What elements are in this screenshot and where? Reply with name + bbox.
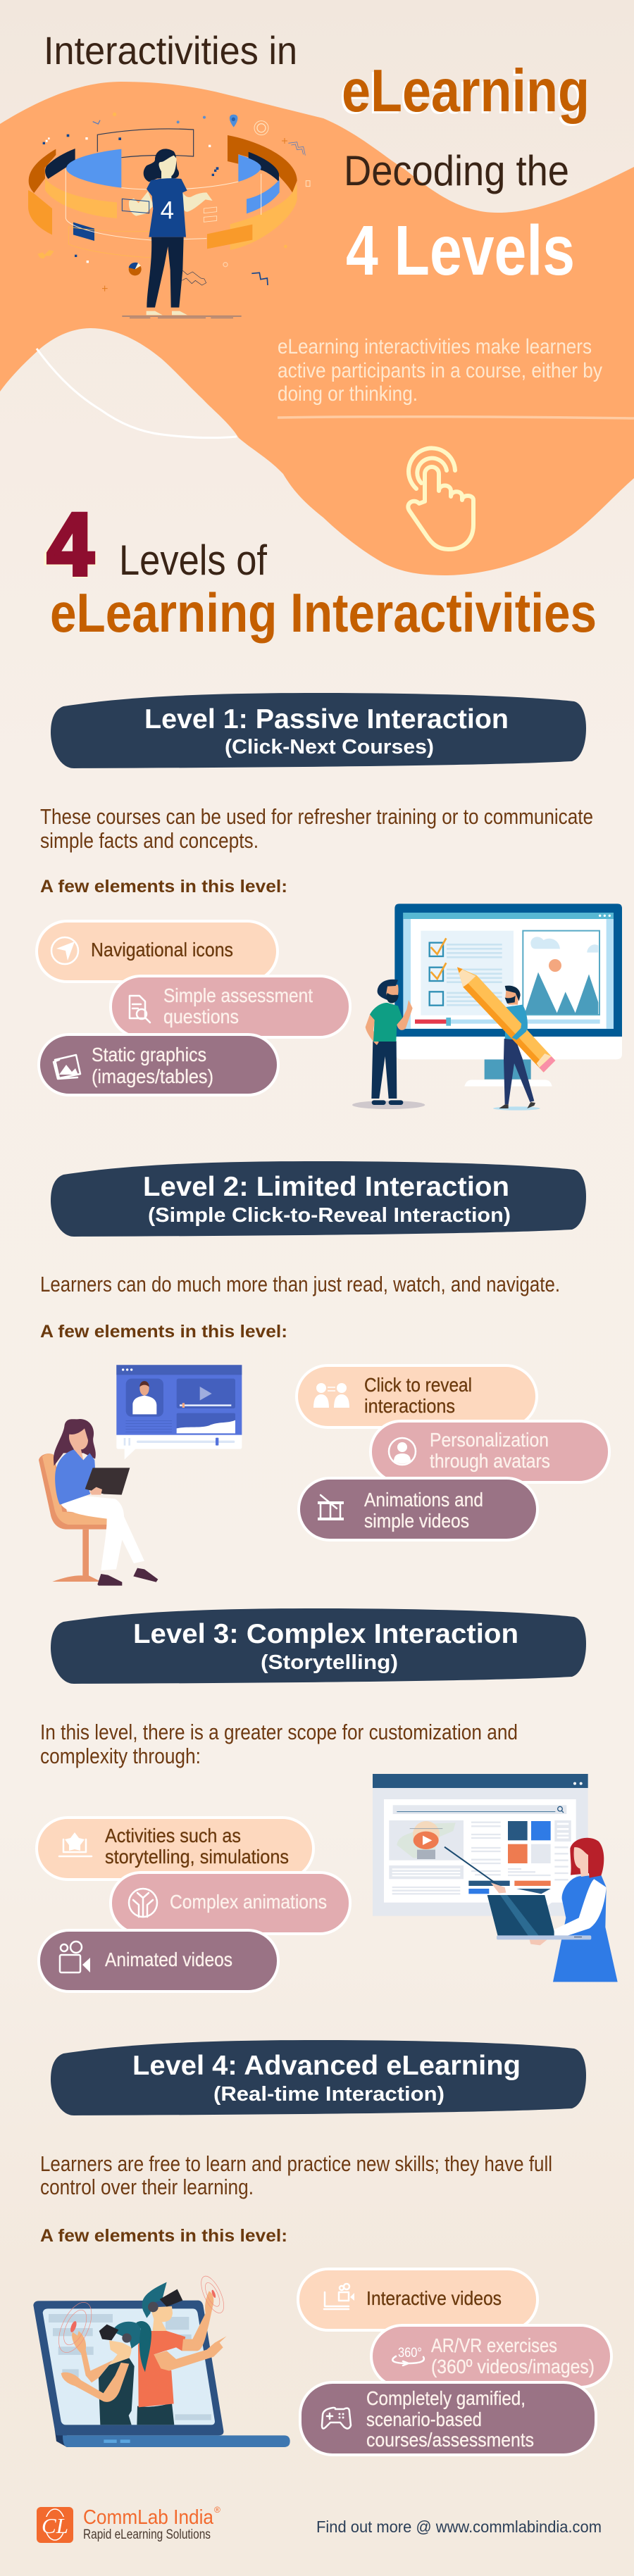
illustration: VR users emerging from laptop: [33, 2273, 290, 2447]
orange hero blob: [0, 82, 634, 575]
level 3 description: complexity through:: [40, 1744, 201, 1768]
level 1 subheading: A few elements in this level:: [40, 877, 287, 896]
pill: static graphics: (images/tables): [92, 1065, 213, 1087]
panel: level 3: [37, 1608, 618, 1992]
level 4 subheading: A few elements in this level:: [40, 2226, 287, 2246]
level 3 description: [40, 1720, 518, 1768]
title: Decoding the: Decoding the: [344, 147, 569, 194]
heading: 4 Levels of: 4: [44, 497, 95, 595]
level 2 banner: [51, 1161, 586, 1237]
pill: click to reveal: Click to reveal: [364, 1374, 472, 1396]
footer link: Find out more @ www.commlabindia.com: [316, 2518, 602, 2536]
level 4 description: control over their learning.: [40, 2175, 254, 2199]
pill: AR/VR exercises: [371, 2325, 611, 2387]
footer logo: Rapid eLearning Solutions: [83, 2527, 211, 2542]
illustration: presenter and browser window: [373, 1774, 618, 1982]
title: Interactivities in: Interactivities in: [44, 28, 297, 73]
pill: personalization: through avatars: [430, 1450, 550, 1472]
pill: gamified courses: Completely gamified,: [366, 2387, 526, 2409]
footer logo: ®: [214, 2505, 220, 2515]
pill: AR/VR exercises: AR/VR exercises: [431, 2334, 557, 2356]
icon: pointing hand: [408, 448, 473, 549]
panel: level 1: [37, 693, 622, 1111]
pill: navigational icons: Navigational icons: [91, 939, 233, 961]
pill: animated videos: [39, 1930, 278, 1992]
panel: level 2: [39, 1161, 609, 1586]
footer logo: [37, 2505, 220, 2543]
pill: gamified courses: courses/assessments: [366, 2429, 534, 2451]
pill: static graphics: [39, 1034, 278, 1095]
level 2 banner: Level 2: Limited Interaction: [143, 1172, 509, 1202]
footer logo: CommLab India: [83, 2506, 214, 2529]
title: eLearning: eLearning: [340, 60, 588, 127]
title: 4 Levels: 4 Levels: [346, 211, 575, 290]
decorative white curve: [37, 349, 237, 438]
level 3 banner: (Storytelling): [261, 1651, 398, 1674]
level 1 description: simple facts and concepts.: [40, 828, 259, 853]
level 2 banner: (Simple Click-to-Reveal Interaction): [148, 1204, 511, 1227]
illustration: woman with interactive rings: [28, 113, 310, 318]
level 1 banner: [51, 693, 586, 768]
level 1 banner: (Click-Next Courses): [225, 736, 434, 758]
pill: personalization: [371, 1421, 609, 1482]
level 1 banner: Level 1: Passive Interaction: [144, 704, 509, 734]
intro paragraph: doing or thinking.: [278, 382, 418, 406]
pill: click to reveal: interactions: [364, 1395, 455, 1417]
title: eLearning: eLearning: [342, 58, 590, 125]
footer logo: CL: [42, 2513, 68, 2538]
illustration: woman with interactive rings: 4: [161, 197, 174, 225]
heading: 4 Levels of: 4: [47, 496, 94, 594]
level 4 description: Learners are free to learn and practice new skills; they have full: [40, 2151, 552, 2176]
level 3 banner: [51, 1608, 586, 1684]
heading: 4 Levels of: [44, 496, 267, 595]
level 4 banner: (Real-time Interaction): [213, 2083, 445, 2106]
illustration: seated woman with video window: [39, 1365, 242, 1586]
level 3 description: In this level, there is a greater scope for customization and: [40, 1720, 518, 1744]
illustration: monitor and two men: [352, 904, 622, 1111]
pill: AR/VR exercises: 360°: [398, 2346, 422, 2361]
level 2 subheading: A few elements in this level:: [40, 1322, 287, 1342]
pill: simple assessment questions: Simple assessment: [163, 984, 313, 1006]
pill: complex animations: Complex animations: [170, 1891, 327, 1913]
pill: activities: storytelling, simulations: [105, 1846, 289, 1868]
pill: AR/VR exercises: (360º videos/images): [431, 2356, 595, 2377]
heading: 4 Levels of: Levels of: [119, 537, 267, 584]
level 4 banner: [51, 2040, 586, 2115]
divider line: [278, 417, 634, 418]
pill: animated videos: Animated videos: [105, 1949, 232, 1970]
pill: complex animations: [111, 1872, 350, 1934]
level 1 description: [40, 804, 593, 853]
panel: level 4: [33, 2040, 611, 2455]
pill: animations: [299, 1478, 537, 1540]
level 3 banner: Level 3: Complex Interaction: [133, 1619, 518, 1649]
pill: personalization: Personalization: [430, 1429, 549, 1451]
pill: animations: simple videos: [364, 1510, 469, 1532]
pill: navigational icons: [37, 921, 278, 982]
intro paragraph: [278, 335, 602, 406]
pill: click to reveal: [297, 1365, 537, 1427]
intro paragraph: eLearning interactivities make learners: [278, 335, 592, 358]
level 4 banner: Level 4: Advanced eLearning: [132, 2051, 521, 2081]
pill: simple assessment questions: [111, 976, 350, 1037]
pill: animations: Animations and: [364, 1489, 483, 1511]
pill: activities: [37, 1818, 313, 1880]
pill: interactive videos: [298, 2269, 537, 2330]
pill: static graphics: Static graphics: [92, 1044, 206, 1065]
level 4 description: [40, 2151, 552, 2199]
pill: activities: Activities such as: [105, 1825, 241, 1846]
pill: simple assessment questions: questions: [163, 1006, 239, 1027]
pill: gamified courses: scenario-based: [366, 2408, 482, 2430]
pill: interactive videos: Interactive videos: [366, 2287, 502, 2309]
pill: gamified courses: [300, 2382, 596, 2455]
